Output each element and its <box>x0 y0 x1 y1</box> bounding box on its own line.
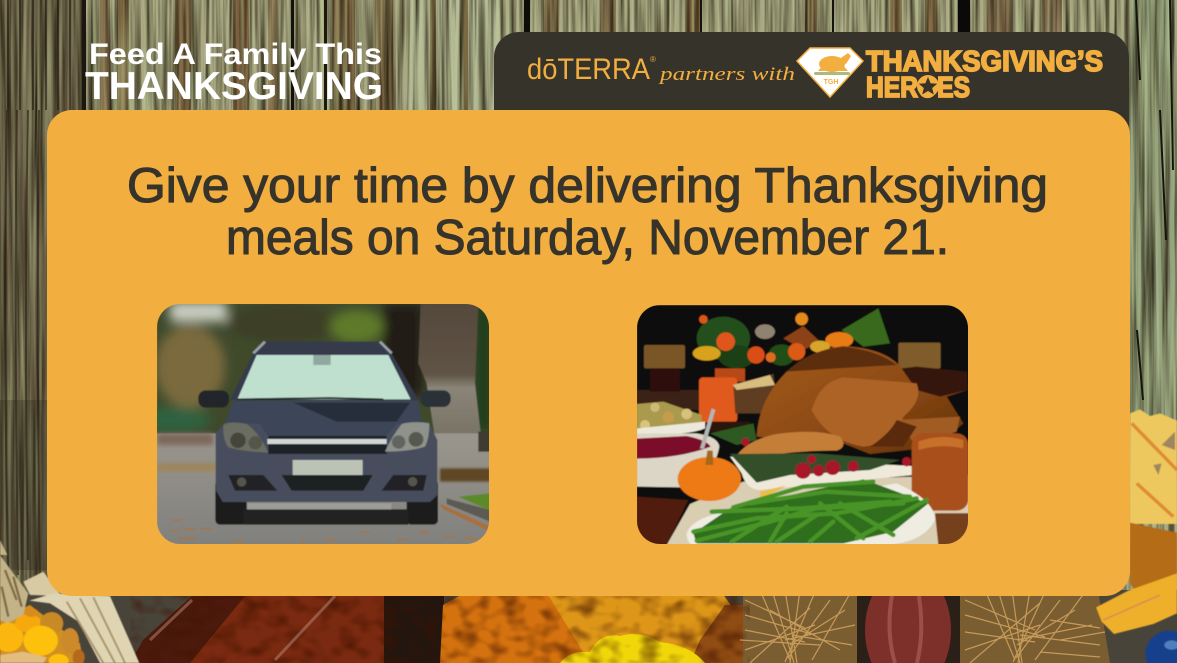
bumper <box>216 422 437 502</box>
call to action text: meals on Saturday, November 21. <box>226 211 949 265</box>
blueberry <box>1145 631 1177 663</box>
headline: Feed A Family This Thanksgiving <box>85 38 383 108</box>
icon: diamond shield with turkey: TGH <box>824 79 838 86</box>
windshield <box>237 355 411 399</box>
large husk <box>29 593 139 663</box>
orange candle <box>715 368 745 382</box>
background: autumn foliage strip <box>0 409 1177 663</box>
mottled leaf texture <box>130 590 750 663</box>
cranberry bowl <box>637 408 719 487</box>
turkey <box>736 346 967 461</box>
call to action text: Give your time by delivering Thanksgiving <box>127 159 1048 213</box>
back husk leaves <box>23 572 62 596</box>
photo: Thanksgiving feast <box>637 305 970 545</box>
corn cob and husk <box>0 540 139 663</box>
brown leaf edge <box>694 605 743 663</box>
goblets <box>644 343 941 392</box>
dark gap between leaves <box>384 590 444 663</box>
lower grilles <box>282 475 373 491</box>
pumpkin <box>678 451 741 501</box>
headline: Feed A Family This Thanksgiving: THANKSGIVING <box>85 65 383 108</box>
headline: Feed A Family This Thanksgiving: Feed A Family This <box>89 38 382 71</box>
doTERRA wordmark: dōTERRA <box>527 53 650 86</box>
kernels base <box>0 605 83 663</box>
road <box>157 433 490 547</box>
orange leaf <box>440 596 584 663</box>
header banner: partner strip <box>494 32 1129 152</box>
floral arrangement <box>693 308 890 368</box>
Thanksgiving's Heroes wordmark: HEROES <box>866 72 970 104</box>
cranberries <box>741 438 911 479</box>
yellow flowers <box>560 634 705 663</box>
mirrors <box>198 390 229 408</box>
red-brown leaf <box>136 596 384 663</box>
platter <box>730 457 913 490</box>
Thanksgiving's Heroes wordmark: THANKSGIVING’S <box>866 46 1103 78</box>
herbs <box>710 423 757 445</box>
panel: main orange card <box>47 110 1130 596</box>
lower-left dark table <box>637 497 688 545</box>
stuffing bowl <box>637 402 705 436</box>
tree trunk <box>418 304 481 434</box>
call to action text <box>127 159 1048 265</box>
photo: car parked on autumn road <box>137 302 490 547</box>
right candle <box>912 433 968 511</box>
upper grille <box>268 436 387 454</box>
left husk <box>0 540 28 623</box>
lower-right wood leaf <box>935 513 970 545</box>
table linen <box>667 475 970 545</box>
doTERRA wordmark: ® <box>650 55 656 64</box>
kernels <box>0 608 85 663</box>
Thanksgiving's Heroes wordmark <box>866 46 1103 104</box>
headlights <box>223 423 268 453</box>
tan candle <box>733 374 775 413</box>
chestnut <box>857 596 960 663</box>
chestnut husk base <box>743 590 1110 663</box>
hood <box>225 401 422 436</box>
car body <box>198 342 451 525</box>
partners with script: partners with <box>657 64 795 85</box>
yellow-orange leaf <box>548 596 731 654</box>
husk spines <box>740 590 1105 663</box>
fallen leaves <box>170 519 477 543</box>
curb and grass <box>447 498 490 522</box>
pale leaf veins <box>150 596 335 660</box>
right autumn leaf <box>1096 409 1177 663</box>
wheels <box>215 480 247 525</box>
icon: diamond shield with turkey <box>797 48 863 97</box>
roof and pillars <box>230 342 418 400</box>
green beans on plate <box>687 479 935 545</box>
under-car shadow <box>243 509 408 525</box>
licence plate <box>293 460 363 477</box>
